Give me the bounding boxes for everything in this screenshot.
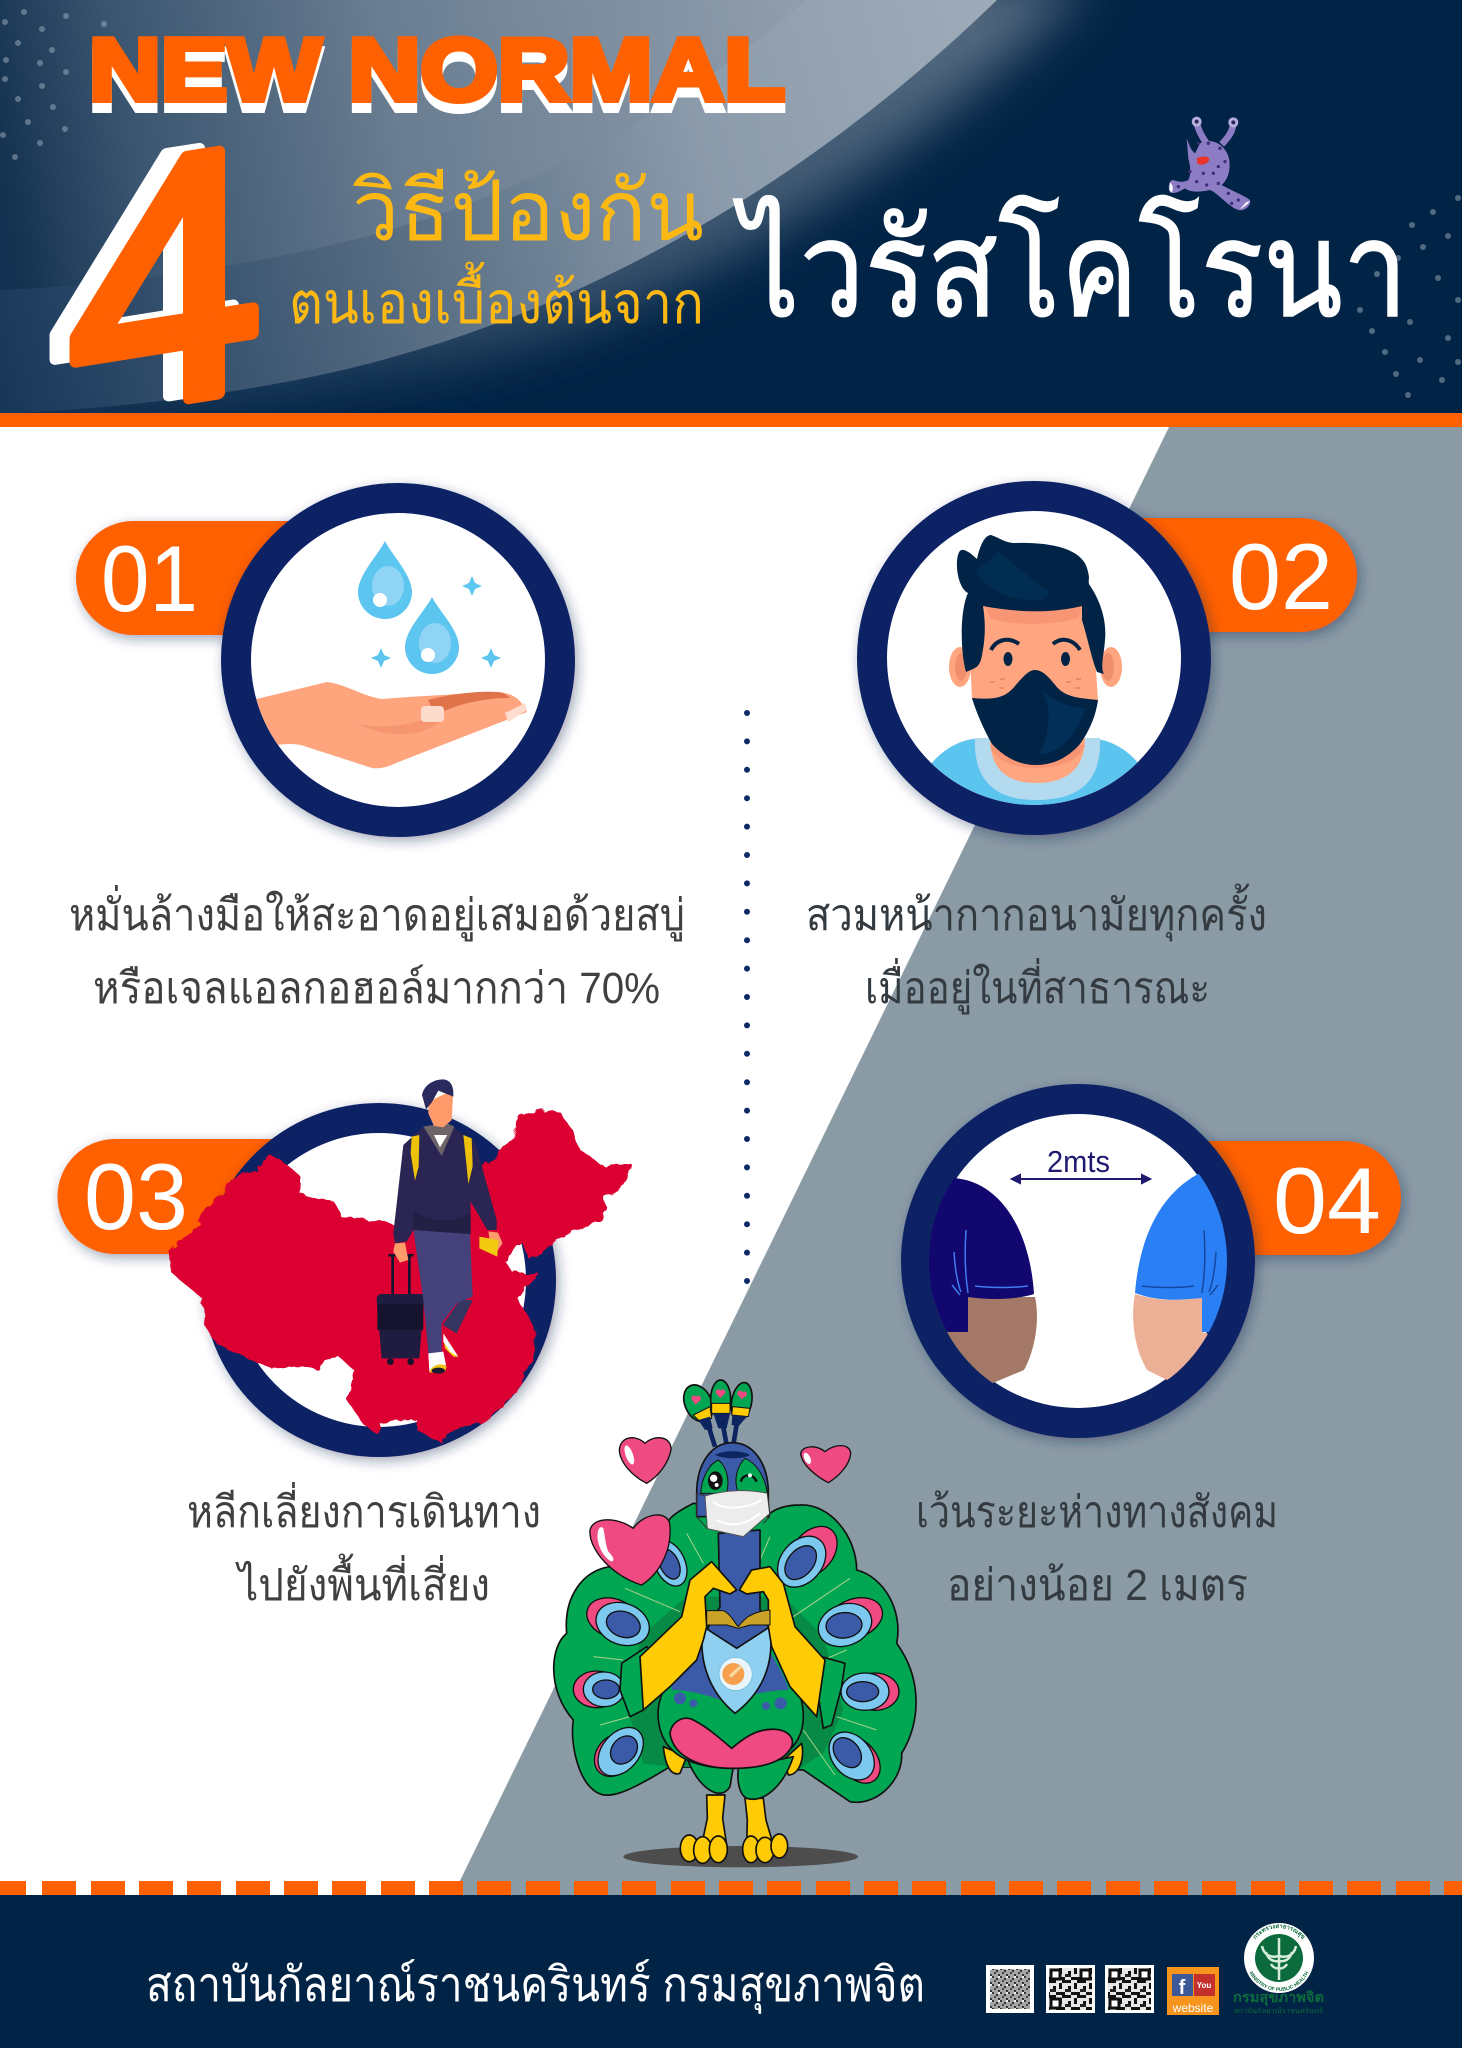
arms with heart hands [620,1647,657,1717]
ring 04 [916,1099,1240,1423]
mascot: peacock with mask [554,1380,916,1867]
badge 04 [1150,1141,1401,1255]
feather eyes [573,1517,899,1792]
belly [670,1718,792,1768]
bib [702,1627,771,1713]
big numeral 4: 4 [68,69,263,491]
social and website badge: You [1197,1981,1211,1990]
badge 01 [76,521,330,635]
suitcase [377,1255,424,1365]
social and website badge: f [1179,1977,1186,1999]
ministry logo: กระทรวงสาธารณสุข [1254,1924,1305,1940]
number 02: 02 [1229,524,1333,629]
badge 03 [57,1139,300,1254]
crest [707,1418,737,1447]
text: step 01 description: หมั่นล้างมือให้สะอาดอยู่เสมอด้วยสบู่ [69,884,685,942]
social and website badge: website [1172,2001,1214,2015]
QR code 1 [986,1965,1034,2013]
text: step 04 description: อย่างน้อย 2 เมตร [947,1561,1248,1610]
hearts [590,1438,851,1585]
decorative dots right [1357,195,1461,398]
icon: traveller with suitcase [377,1079,503,1374]
footer band [0,1881,1462,2048]
head [697,1443,768,1517]
icon: purple virus monster [1169,117,1250,210]
double arrow [1012,1175,1150,1183]
panel: step 01 wash hands [76,498,560,822]
icon: two people at distance [929,1150,1227,1383]
institute name: สถาบันกัลยาณ์ราชนครินทร์ กรมสุขภาพจิต [146,1959,925,2014]
panel: step 03 avoid travel [57,1079,630,1442]
badge [719,1657,752,1691]
title: NEW NORMAL: NEW NORMAL [89,20,785,119]
panel: step 02 wear mask [872,496,1357,820]
subtitle: yourself from: ตนเองเบื้องต้นจาก [289,262,704,336]
dotted divider [744,713,750,1283]
icon: water drops and hand [240,541,527,768]
text: step 02 description [806,883,1267,1015]
text: step 03 description: หลีกเลี่ยงการเดินทาง [187,1481,541,1537]
header banner [0,0,1462,427]
text: step 02 description: เมื่ออยู่ในที่สาธารณะ [865,957,1210,1015]
icon: man wearing mask [932,535,1138,805]
QR code 2 [1046,1965,1095,2013]
number 01: 01 [101,526,198,631]
ring 02 [872,496,1196,820]
big numeral 4: 4 [48,66,243,489]
number 03: 03 [84,1144,188,1249]
orange header rule [0,413,1462,427]
map of China [169,1112,630,1442]
thighs [687,1757,793,1799]
subtitle: way to protect: วิธีป้องกัน [352,164,704,258]
text: step 03 description: ไปยังพื้นที่เสี่ยง [235,1553,490,1610]
ministry logo: กรมสุขภาพจิต [1233,1989,1324,2006]
number 04: 04 [1273,1148,1381,1253]
ring 03 [217,1118,541,1442]
text: step 02 description: สวมหน้ากากอนามัยทุกครั้ง [806,883,1267,942]
neck [707,1530,770,1648]
body [658,1637,803,1768]
decorative dots left [0,9,107,160]
social and website badge [1167,1967,1219,2015]
ministry logo: MINISTRY OF PUBLIC HEALTH [1250,1971,1308,1991]
badge 02 [1100,518,1357,632]
text: step 04 description [916,1488,1278,1610]
face mask [705,1491,770,1537]
ministry logo [1233,1923,1324,2015]
dashed orange strip [0,1881,1462,1895]
legs and feet [680,1795,788,1863]
tail feathers [554,1503,916,1802]
ring 01 [236,498,560,822]
ministry logo: สถาบันกัลยาณ์ราชนครินทร์ [1234,2007,1323,2015]
panel: step 04 social distancing [916,1099,1401,1423]
text: step 01 description: หรือเจลแอลกอฮอล์มากกว่า 70% [93,964,660,1013]
text: step 01 description [69,884,685,1013]
text: step 03 description [187,1481,541,1610]
shadow [623,1846,858,1867]
measure label: 2mts [1047,1144,1110,1179]
side tufts [663,1743,803,1775]
title: NEW NORMAL: NEW NORMAL [89,30,785,129]
text: step 04 description: เว้นระยะห่างทางสังคม [916,1488,1278,1537]
QR code 3 [1105,1965,1154,2013]
